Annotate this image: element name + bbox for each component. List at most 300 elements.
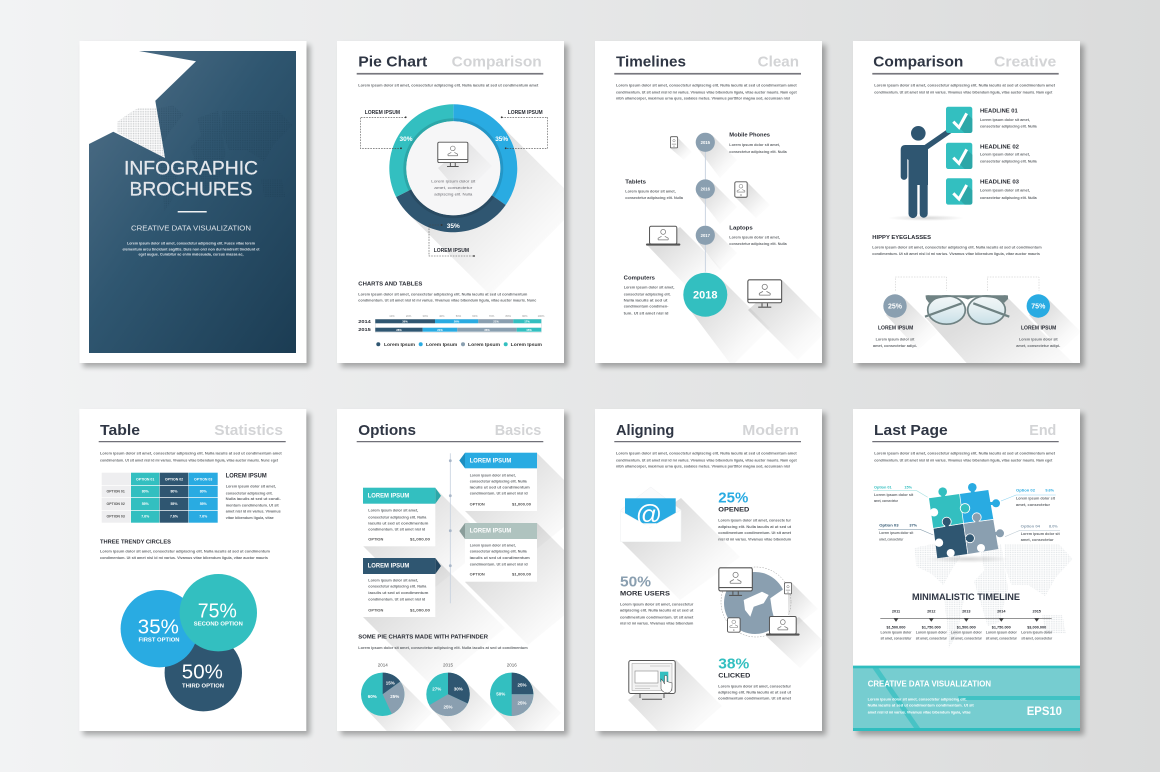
- footer banner: amet nisl id mi varius. Vivamus vitae bibendum ligula, vitae: [868, 710, 971, 714]
- callout: option 04: amet, consectetur: [1021, 537, 1054, 542]
- pie chart 2015: [426, 662, 470, 716]
- minimalistic timeline: $1,500.000: [957, 625, 976, 629]
- floor shadow: [888, 215, 964, 221]
- minimalistic timeline: Lorem ipsum dolor: [986, 630, 1017, 634]
- minimalistic timeline: [880, 610, 1053, 640]
- intro text: [616, 450, 797, 469]
- headline 02: consectetur adipiscing elit. Nulla: [980, 159, 1037, 164]
- stacked bar chart: 30%: [423, 314, 428, 318]
- headline 01: HEADLINE 01: [980, 109, 1018, 115]
- stat: opened: condimentum condimentum. Ut sit amet: [718, 530, 792, 535]
- cover title: [124, 158, 258, 201]
- entry: laptops: Lorem ipsum dolor sit amet,: [729, 235, 780, 240]
- card: grey: iaculis ut sed ut condimentum: [470, 555, 530, 560]
- data table: 7.6%: [170, 514, 179, 518]
- side text: vitae bibendum ligula, vitae: [226, 515, 274, 520]
- minimalistic timeline: 2011: [892, 610, 900, 614]
- stacked bar chart: 15%: [526, 328, 532, 332]
- data table: 7.6%: [141, 514, 150, 518]
- entry: computers: tum. Ut sit amet nisl id: [624, 310, 669, 315]
- icon: person pointing: [901, 126, 950, 218]
- card: grey: Lorem ipsum dolor sit amet,: [470, 543, 516, 548]
- timeline title: MINIMALISTIC TIMELINE: [912, 592, 1020, 602]
- callout: option 01: 15%: [904, 486, 913, 490]
- data table: 55%: [142, 502, 150, 506]
- pie chart 2015: 27%: [432, 686, 441, 692]
- intro text: nibh ullamcorper, maximus urna quis, sodales metus. Vivamus porttitor magna sed, accumsan nisl: [616, 464, 790, 469]
- stat: more users: [620, 574, 694, 625]
- panel: timelines page: [595, 41, 830, 367]
- stacked bar chart: 50%: [456, 314, 462, 318]
- floor shadow: [926, 555, 1010, 563]
- section: three trendy circles: [100, 540, 270, 560]
- heading: Aligning: [616, 422, 674, 439]
- stacked bar chart: 2015: [358, 327, 371, 332]
- pie chart 2016: 50%: [496, 692, 505, 696]
- intro text: [616, 83, 797, 100]
- headline 03: consectetur adipiscing elit. Nulla: [980, 195, 1037, 200]
- data table: 80%: [200, 490, 208, 494]
- world map dots: [914, 539, 1073, 648]
- heading: Comparison: [873, 54, 963, 71]
- stat: more users: MORE USERS: [620, 591, 671, 598]
- timeline nodes: 2015: [701, 140, 711, 145]
- pie chart 2014: 2014: [378, 662, 388, 667]
- intro text: Lorem ipsum dolor sit amet, consectetur adipiscing elit. Nulla iaculis at sed ut condimentum amet: [874, 83, 1056, 88]
- headline 01: [980, 109, 1037, 128]
- circle: third option: 50%: [182, 662, 223, 684]
- card: dark: $1,000.00: [410, 609, 430, 613]
- section: hippy eyeglasses: condimentum. Ut sit amet nisl id mi varius. Vivamus vitae bibendum ligula, vitae auctor mauris: [872, 251, 1041, 256]
- data table: 80%: [142, 490, 150, 494]
- legend: Lorem Ipsum: [426, 342, 457, 347]
- headline 03: Lorem ipsum dolor sit amet,: [980, 188, 1030, 193]
- percent labels: 35%: [495, 136, 508, 143]
- heading: Creative: [994, 54, 1056, 71]
- data table: OPTION 02: [107, 502, 125, 506]
- stacked bar chart: 21%: [437, 328, 443, 332]
- callout: option 03: Option 03: [879, 524, 899, 528]
- panel: table page: [79, 409, 310, 735]
- callout: option 01: amet, consectetur: [874, 498, 898, 503]
- callout: option 01: Option 01: [874, 486, 892, 490]
- cover subtitle: CREATIVE DATA VISUALIZATION: [131, 226, 251, 233]
- heading: [614, 54, 801, 75]
- icon: checkmark 2: [946, 143, 972, 169]
- panel: options page: [337, 409, 571, 738]
- heading: [99, 422, 286, 442]
- card: blue: Lorem ipsum dolor sit amet,: [470, 473, 516, 478]
- entry: mobile phones: [729, 133, 787, 154]
- stat: 25%: [883, 294, 907, 318]
- heading: [872, 54, 1059, 75]
- section: three trendy circles: condimentum. Ut sit amet nisl id mi varius. Vivamus vitae bibendum ligula, vitae auctor mauris: [100, 555, 269, 560]
- donut chart: [389, 104, 517, 232]
- timeline axis: [449, 453, 452, 603]
- panel: pie chart page: [337, 41, 580, 367]
- long shadows: [621, 498, 825, 748]
- footer banner: [853, 666, 1080, 731]
- cover background with star cut-out: [89, 51, 296, 353]
- intro text: nibh ullamcorper, maximus urna quis, sodales metus. Vivamus porttitor magna sed, accumsan nisl: [616, 95, 790, 100]
- callout: option 02: Lorem ipsum dolor sit: [1016, 496, 1056, 501]
- pie chart 2016: 25%: [517, 682, 527, 688]
- heading: Options: [358, 422, 416, 439]
- intro text: Lorem ipsum dolor sit amet, consectetur adipiscing elit. Nulla iaculis at sed ut condimentum amet: [874, 450, 1056, 455]
- card: dark: consectetur adipiscing elit. Nulla: [368, 584, 427, 589]
- stacked bar chart: 10%: [389, 314, 395, 318]
- minimalistic timeline: sit amet, consectetur: [880, 636, 912, 640]
- callout: option 02: [1001, 489, 1056, 507]
- legend: Lorem Ipsum: [384, 342, 415, 347]
- heading: Last Page: [874, 422, 948, 439]
- stat: opened: adipiscing elit. Nulla iaculis at ut sed ut: [718, 524, 792, 529]
- minimalistic timeline: 2014: [997, 610, 1006, 614]
- headline 02: Lorem ipsum dolor sit amet,: [980, 152, 1030, 157]
- heading: Timelines: [616, 54, 686, 71]
- minimalistic timeline: Lorem ipsum dolor: [880, 630, 912, 634]
- card: teal: consectetur adipiscing elit. Nulla: [368, 514, 427, 519]
- percent labels: [399, 136, 508, 230]
- card: teal: iaculis ut sed ut condimentum: [368, 520, 429, 525]
- timeline nodes: 2018: [693, 290, 718, 302]
- pie chart 2015: 25%: [443, 705, 453, 710]
- data table: OPTION 03: [194, 478, 212, 482]
- intro text: condimentum. Ut sit amet nisl id mi varius. Vivamus vitae bibendum ligula, vitae auctor mauris. Nunc eget: [100, 457, 279, 462]
- stacked bar chart: 36%: [402, 319, 408, 323]
- minimalistic timeline: $1,750.000: [922, 625, 941, 629]
- leader lines and callouts: [360, 110, 548, 257]
- donut centre text: [431, 180, 476, 197]
- cover title: INFOGRAPHIC: [124, 158, 258, 180]
- side text: mentum condimentum. Ut sit: [226, 502, 279, 507]
- stacked bar chart: 28%: [396, 328, 402, 332]
- icon: monitor: [748, 280, 782, 307]
- data table: OPTION 03: [107, 514, 125, 518]
- side text: amet nisl id mi varius. Vivamus: [226, 509, 281, 514]
- section text: Lorem ipsum dolor sit amet, consectetur adipiscing elit. Nulla iaculis at sed ut condimentum: [358, 292, 528, 297]
- entry: tablets: consectetur adipiscing elit. Nulla: [625, 195, 684, 200]
- card: grey: $1,000.00: [512, 573, 531, 577]
- stacked bar chart: 70%: [489, 314, 495, 318]
- section heading: charts and tables: CHARTS AND TABLES: [358, 282, 423, 288]
- side text: consectetur adipiscing elit.: [226, 490, 273, 495]
- intro text: Lorem ipsum dolor sit amet, consectetur adipiscing elit. Nulla iaculis at sed ut condimentum amet: [100, 450, 282, 455]
- footer banner: Nulla iaculis at sed ut condimentum condimentum. Ut sit: [868, 704, 975, 708]
- heading: [614, 422, 801, 442]
- data table: OPTION 01: [107, 490, 125, 494]
- card: grey: OPTION: [470, 573, 485, 577]
- card: teal: Lorem ipsum dolor sit amet,: [368, 508, 418, 513]
- callout: option 01: [873, 486, 928, 503]
- card: teal: OPTION: [368, 538, 384, 542]
- card: grey: LOREM IPSUM: [470, 528, 511, 535]
- timeline nodes: 2016: [701, 186, 711, 192]
- stacked bar chart: 80%: [506, 314, 511, 318]
- stat: opened: Lorem ipsum dolor sit amet, consecte tur: [718, 518, 791, 523]
- intro text: condimentum. Ut sit amet nisl id mi varius. Vivamus vitae bibendum ligula, vitae auctor mauris. Nam eget: [616, 457, 797, 462]
- pie chart 2014: [361, 662, 404, 716]
- stacked bar chart: 20%: [406, 314, 412, 318]
- stat: more users: nisl id mi varius. Vivamus vitae bibendum: [620, 620, 694, 625]
- card: teal: LOREM IPSUM: [368, 493, 409, 500]
- panel: last page: [853, 409, 1084, 735]
- callout: option 04: 8.0%: [1049, 525, 1058, 529]
- icon: laptop: [646, 226, 680, 246]
- callout: option 04: [1005, 525, 1060, 542]
- stat: 75%: 75%: [1031, 304, 1046, 311]
- data table: 7.6%: [199, 514, 208, 518]
- timeline axis: [704, 152, 707, 272]
- side text: Nulla iaculis at sed ut condi-: [226, 496, 281, 501]
- minimalistic timeline: 2015: [1032, 610, 1041, 614]
- entry: computers: consectetur adipiscing elit.: [624, 292, 671, 297]
- circle: first option: 35%: [138, 616, 179, 638]
- stat: clicked: [718, 656, 792, 700]
- side text: LOREM IPSUM: [226, 474, 267, 480]
- minimalistic timeline: sit amet, consectetur: [1021, 636, 1053, 640]
- card: dark: OPTION: [368, 609, 384, 613]
- stacked bar chart: 100%: [538, 314, 545, 318]
- footer banner: CREATIVE DATA VISUALIZATION: [868, 680, 991, 689]
- label: left: [873, 326, 918, 348]
- section: three trendy circles: Lorem ipsum dolor sit amet, consectetur adipiscing elit. Nulla iaculis at sed ut condimentum: [100, 548, 270, 553]
- callout: option 04: Option 04: [1021, 525, 1041, 529]
- pie chart 2014: 60%: [368, 694, 377, 699]
- leader lines and callouts: LOREM IPSUM: [365, 110, 400, 116]
- stat: opened: [718, 490, 792, 542]
- data table: OPTION 01: [136, 478, 154, 482]
- stat: clicked: condimentum condimentum. Ut sit amet: [718, 695, 792, 700]
- card: blue: $1,000.00: [512, 502, 531, 506]
- heading: [357, 54, 543, 75]
- intro text: condimentum. Ut sit amet nisl id mi varius. Vivamus vitae bibendum ligula, vitae auctor mauris. Nam eget: [874, 89, 1053, 94]
- label: right: [1016, 326, 1061, 348]
- long shadow: [408, 123, 564, 282]
- pie chart 2015: 2015: [443, 662, 454, 667]
- entry: laptops: [729, 226, 787, 246]
- dashed connectors: [895, 277, 1039, 291]
- long shadows: [363, 453, 564, 676]
- minimalistic timeline: Lorem ipsum dolor: [1021, 630, 1053, 634]
- section: hippy eyeglasses: HIPPY EYEGLASSES: [872, 235, 931, 241]
- stat: opened: OPENED: [718, 507, 750, 514]
- headline 01: Lorem ipsum dolor sit amet,: [980, 117, 1030, 122]
- pie chart 2015: 30%: [454, 686, 463, 692]
- donut centre text: Lorem ipsum dolor sit: [431, 180, 476, 184]
- stat: clicked: 38%: [718, 656, 749, 673]
- legend: Lorem Ipsum: [468, 342, 500, 347]
- leader lines and callouts: LOREM IPSUM: [508, 110, 543, 116]
- data table: 80%: [170, 490, 178, 494]
- card: blue: condimentum. Ut sit amet nisl id: [470, 491, 528, 496]
- side text: [226, 474, 281, 520]
- label: left: LOREM IPSUM: [878, 326, 913, 332]
- stacked bar chart: 40%: [439, 314, 445, 318]
- callout: option 03: 37%: [909, 524, 918, 528]
- heading: End: [1029, 422, 1056, 439]
- minimalistic timeline: $3,000.000: [1027, 625, 1046, 629]
- intro text: condimentum. Ut sit amet nisl id mi varius. Vivamus vitae bibendum ligula, vitae auctor mauris. Nam eget: [874, 457, 1053, 462]
- percent labels: 30%: [399, 136, 413, 143]
- heading: Clean: [758, 54, 799, 71]
- pie chart 2016: [490, 662, 533, 716]
- heading: Comparison: [452, 54, 542, 71]
- cover text: eget augue. Curabitur ac enim malesuada, cursus massa ac,: [138, 252, 244, 257]
- card: blue: OPTION: [470, 502, 485, 506]
- card: dark: iaculis ut sed ut condimentum: [368, 590, 429, 595]
- headline 02: HEADLINE 02: [980, 145, 1019, 151]
- minimalistic timeline: sit amet, consectetur: [916, 636, 947, 640]
- card: teal: [363, 488, 441, 546]
- timeline nodes: [683, 133, 727, 317]
- callout: option 03: amet, consectetur: [879, 536, 904, 541]
- legend: [376, 342, 542, 347]
- headline 02: [980, 145, 1037, 164]
- stat: clicked: adipiscing elit. Nulla iaculis at ut sed ut: [718, 689, 792, 694]
- entry: mobile phones: Lorem ipsum dolor sit amet,: [729, 142, 780, 147]
- heading: [872, 422, 1059, 442]
- minimalistic timeline: sit amet, consectetur: [986, 636, 1017, 640]
- data table: [102, 473, 218, 523]
- icon: checkmark 3: [946, 178, 972, 205]
- intro text: condimentum. Ut sit amet nisl id mi varius. Vivamus vitae bibendum ligula, vitae auctor mauris. Nam eget: [616, 89, 797, 94]
- label: left: Lorem ipsum dolor sit: [876, 337, 915, 342]
- panel: aligning page: [595, 409, 826, 748]
- stat: 25%: 25%: [888, 304, 903, 311]
- card: dark: condimentum. Ut sit amet nisl id: [368, 597, 426, 602]
- donut centre text: amet, consectetur: [434, 186, 473, 190]
- entry: computers: condimentum condimen-: [624, 304, 669, 309]
- card: grey: [459, 523, 537, 582]
- circle: first option: [121, 590, 198, 667]
- entry: mobile phones: consectetur adipiscing elit. Nulla: [729, 149, 787, 154]
- intro text: Lorem ipsum dolor sit amet, consectetur adipiscing elit. Nulla iaculis at sed ut condimentum amet: [616, 450, 797, 455]
- donut centre text: adipiscing elit. Nulla: [434, 193, 473, 197]
- label: left: amet, consectetur adipi-: [873, 343, 918, 348]
- stacked bar chart: 21%: [493, 319, 499, 323]
- stacked bar chart: 2014: [358, 319, 371, 324]
- minimalistic timeline: $1,500.000: [886, 625, 906, 629]
- stat: clicked: Lorem ipsum dolor sit amet, consectetur: [718, 684, 791, 689]
- data table: 55%: [170, 502, 178, 506]
- section: pie charts: SOME PIE CHARTS MADE WITH PATHFINDER: [358, 635, 488, 641]
- intro text: [874, 83, 1056, 94]
- heading: Basics: [495, 422, 541, 439]
- entry: tablets: Lorem ipsum dolor sit amet,: [625, 189, 676, 194]
- footer banner: EPS10: [1027, 704, 1062, 718]
- icon: email envelope: @: [636, 499, 662, 529]
- entry: laptops: consectetur adipiscing elit. Nulla: [729, 241, 787, 246]
- circle: third option: [165, 634, 242, 711]
- card: blue: [459, 453, 537, 511]
- card: teal: condimentum. Ut sit amet nisl id: [368, 526, 426, 531]
- entry: computers: Nulla iaculis at sed ut: [624, 298, 668, 303]
- stat: more users: adipiscing elit. Nulla iaculis at ut sed ut: [620, 608, 694, 613]
- icon: checkmark 1: [946, 107, 972, 133]
- pie chart 2014: 25%: [390, 694, 399, 699]
- icon: globe with devices: [719, 567, 800, 637]
- callout: option 03: Lorem ipsum dolor sit: [879, 530, 914, 535]
- leader lines and callouts: LOREM IPSUM: [434, 248, 469, 254]
- section text: [358, 292, 537, 303]
- heading: Table: [100, 422, 140, 439]
- callout: option 03: [878, 524, 933, 541]
- label: right: LOREM IPSUM: [1021, 326, 1056, 332]
- card: blue: consectetur adipiscing elit. Nulla: [470, 479, 527, 484]
- cover text: elementum arcu tincidunt sagittis. Duis non orci non dui hendrerit tincidunt et: [122, 246, 260, 251]
- minimalistic timeline: $1,750.000: [992, 625, 1011, 629]
- section: pie charts: Lorem ipsum dolor sit amet, consectetur adipiscing elit. Nulla iaculis at sed ut condimentum: [358, 645, 528, 650]
- side text: Lorem ipsum dolor sit amet,: [226, 484, 276, 489]
- heading: [357, 422, 543, 442]
- circle: second option: [180, 574, 257, 651]
- stacked bar chart: 36%: [484, 328, 490, 332]
- heading: Modern: [742, 422, 799, 439]
- intro text: [874, 450, 1056, 462]
- card: grey: consectetur adipiscing elit. Nulla: [470, 549, 527, 554]
- minimalistic timeline: 2012: [927, 610, 936, 614]
- long shadows: [886, 298, 1072, 363]
- circle: third option: THIRD OPTION: [182, 683, 224, 689]
- icon: email envelope: [621, 487, 681, 542]
- intro text: Lorem ipsum dolor sit amet, consectetur adipiscing elit. Nulla iaculis at sed ut condimentum amet: [616, 83, 797, 88]
- minimalistic timeline: Lorem ipsum dolor: [916, 630, 947, 634]
- heading: Pie Chart: [358, 54, 427, 71]
- stat: 75%: [1027, 294, 1050, 318]
- card: dark: [363, 558, 441, 617]
- stat: opened: 25%: [718, 490, 748, 507]
- panel: comparison page: [853, 41, 1085, 400]
- minimalistic timeline: Lorem ipsum dolor: [951, 630, 982, 634]
- entry: laptops: Laptops: [729, 226, 753, 232]
- icon: eyeglasses: [925, 295, 1009, 324]
- callout: option 01: Lorem ipsum dolor sit: [874, 492, 914, 497]
- stacked bar chart: [358, 314, 545, 332]
- stat: opened: nisl id mi varius. Vivamus vitae bibendum: [718, 537, 791, 542]
- icon: tablet: [735, 182, 747, 197]
- label: right: amet, consectetur adipi-: [1016, 343, 1061, 348]
- cover text: Lorem ipsum dolor sit amet, consectetur adipiscing elit. Fusce vitae lorem: [127, 240, 255, 245]
- card: grey: condimentum. Ut sit amet nisl id: [470, 561, 528, 566]
- section: pie charts: [358, 635, 528, 650]
- circle: first option: FIRST OPTION: [138, 638, 180, 644]
- footer banner: Lorem ipsum dolor sit amet, consectetur adipiscing elit.: [868, 698, 967, 702]
- pie chart 2016: 2016: [507, 662, 517, 667]
- callout: option 02: 9.6%: [1045, 489, 1055, 493]
- stat: more users: 50%: [620, 574, 651, 591]
- icon: browser with pointer: [629, 660, 675, 699]
- headline 03: [980, 180, 1037, 200]
- card: dark: LOREM IPSUM: [368, 563, 409, 570]
- entry: computers: Lorem ipsum dolor sit amet,: [624, 285, 674, 290]
- minimalistic timeline: sit amet, consectetur: [951, 636, 982, 640]
- stat: more users: Lorem ipsum dolor sit amet, consectetur: [620, 602, 694, 607]
- icon: puzzle pieces: [929, 483, 1004, 558]
- entry: tablets: [625, 179, 684, 200]
- circle: second option: SECOND OPTION: [194, 622, 243, 628]
- card: blue: LOREM IPSUM: [470, 458, 511, 465]
- stacked bar chart: 26%: [454, 319, 460, 323]
- entry: tablets: Tablets: [625, 179, 646, 185]
- headline 03: HEADLINE 03: [980, 180, 1019, 186]
- entry: computers: [624, 276, 674, 315]
- section: hippy eyeglasses: Lorem ipsum dolor sit amet, consectetur adipiscing elit. Nulla iaculis at sed ut condimentum: [872, 244, 1042, 249]
- callout: option 02: Option 02: [1016, 489, 1035, 493]
- entry: mobile phones: Mobile Phones: [729, 133, 770, 139]
- data table: 55%: [200, 502, 208, 506]
- card: teal: $1,000.00: [410, 538, 430, 542]
